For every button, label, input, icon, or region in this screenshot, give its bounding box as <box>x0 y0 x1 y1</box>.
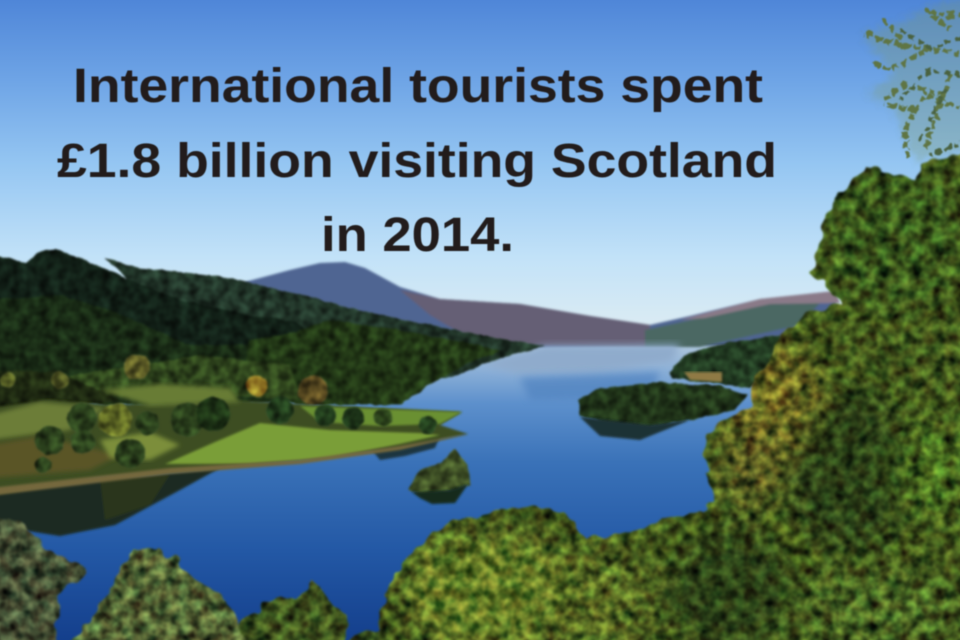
far mountains <box>245 262 840 350</box>
distant water haze <box>480 345 680 374</box>
small rocky islet <box>408 448 470 504</box>
sky background <box>0 0 960 330</box>
canopy colour patches <box>400 165 960 640</box>
dark water band <box>520 372 660 400</box>
far headland <box>670 335 790 388</box>
reflection of hills <box>0 436 440 536</box>
lake water <box>0 344 960 640</box>
foreground trees bottom left <box>0 517 385 640</box>
headline: £1.8 billion visiting Scotland <box>57 135 777 188</box>
upper right branch foliage <box>862 0 960 160</box>
left forested hills <box>0 249 545 410</box>
headline: International tourists spent <box>73 60 763 113</box>
headline <box>57 60 777 262</box>
shore trees <box>0 354 437 473</box>
headline: in 2014. <box>321 209 514 262</box>
wooded island <box>578 382 748 440</box>
meadow shore <box>0 384 468 496</box>
right tree canopy <box>374 150 960 640</box>
